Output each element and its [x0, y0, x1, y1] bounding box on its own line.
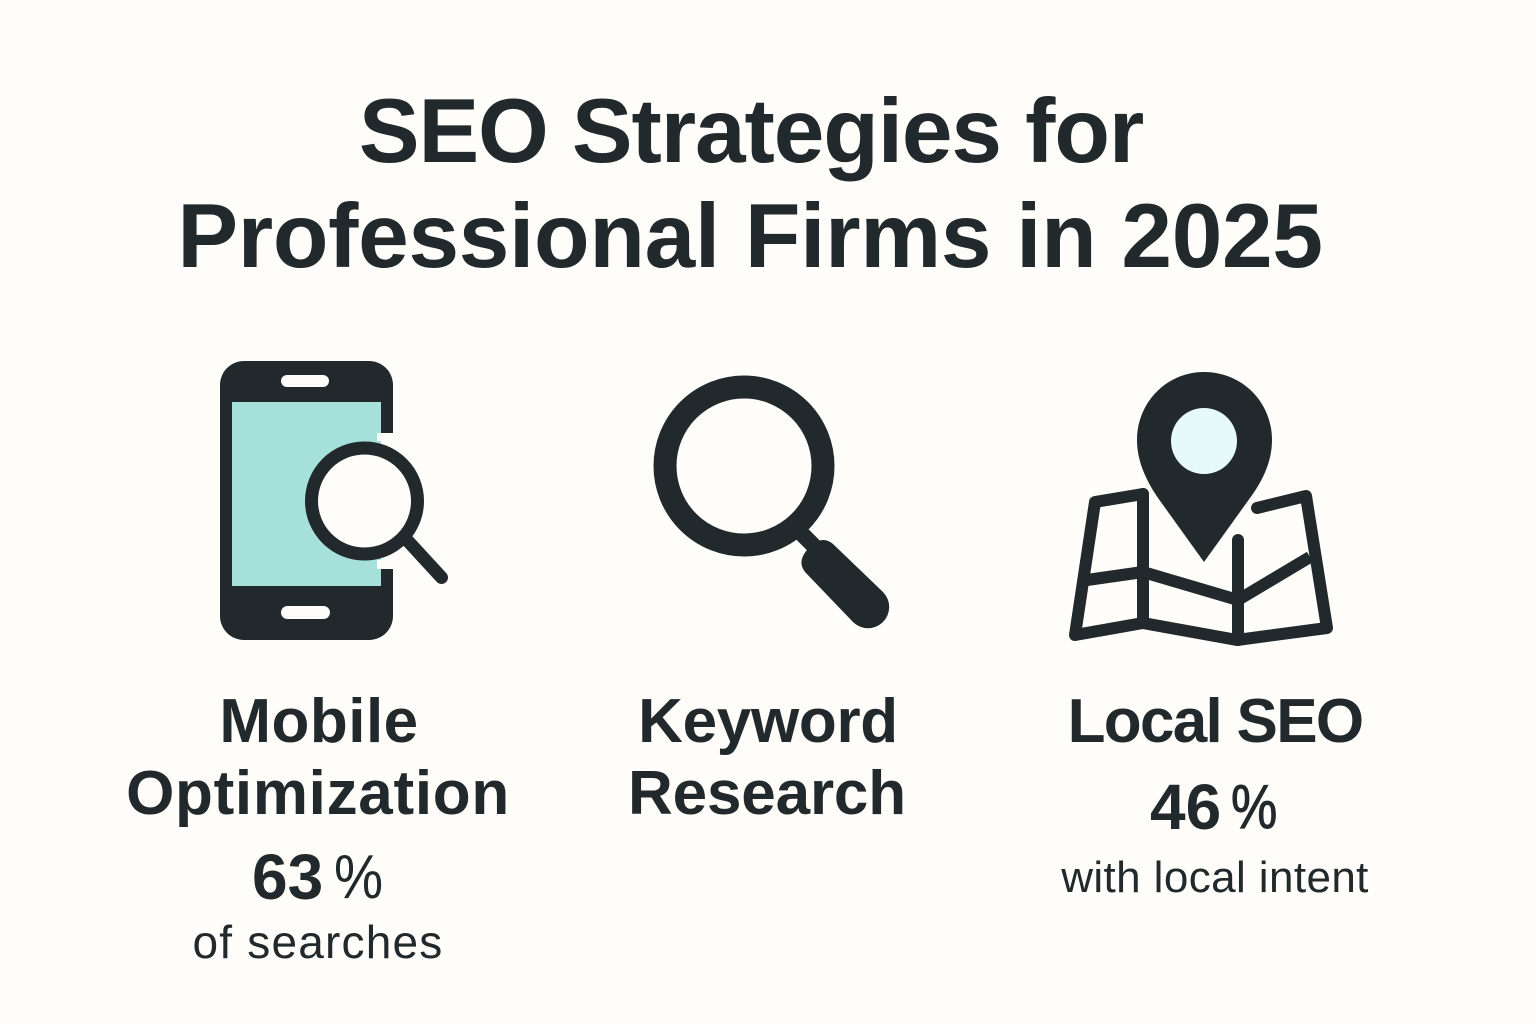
- title: Professional Firms in 2025: [177, 186, 1323, 287]
- heading: Mobile Optimization: Optimization: [126, 759, 510, 828]
- icon: map with location pin: [1069, 372, 1333, 646]
- title: [177, 81, 1323, 287]
- heading: Local SEO: Local SEO: [1068, 687, 1362, 756]
- column: Keyword Research: [628, 687, 906, 828]
- stat: 46%: [1150, 771, 1277, 843]
- column: Keyword Research: Keyword: [638, 687, 898, 756]
- column: Mobile Optimization: [126, 687, 510, 968]
- stat: 46%: 46: [1150, 771, 1221, 843]
- column: Keyword Research: Research: [628, 759, 906, 828]
- heading: Mobile Optimization: [126, 687, 510, 828]
- stat: 63%: [252, 841, 383, 913]
- caption: of searches: of searches: [192, 916, 444, 968]
- stat: 46%: %: [1231, 772, 1277, 842]
- stat: 63%: 63: [252, 841, 323, 913]
- icon: magnifying glass: [654, 376, 890, 628]
- title: SEO Strategies for: [359, 81, 1143, 182]
- column: Local SEO: [1061, 687, 1369, 902]
- heading: Mobile Optimization: Mobile: [219, 687, 419, 756]
- stat: 63%: %: [334, 842, 383, 912]
- caption: with local intent: with local intent: [1061, 853, 1369, 902]
- icon: phone with magnifier: [220, 361, 448, 640]
